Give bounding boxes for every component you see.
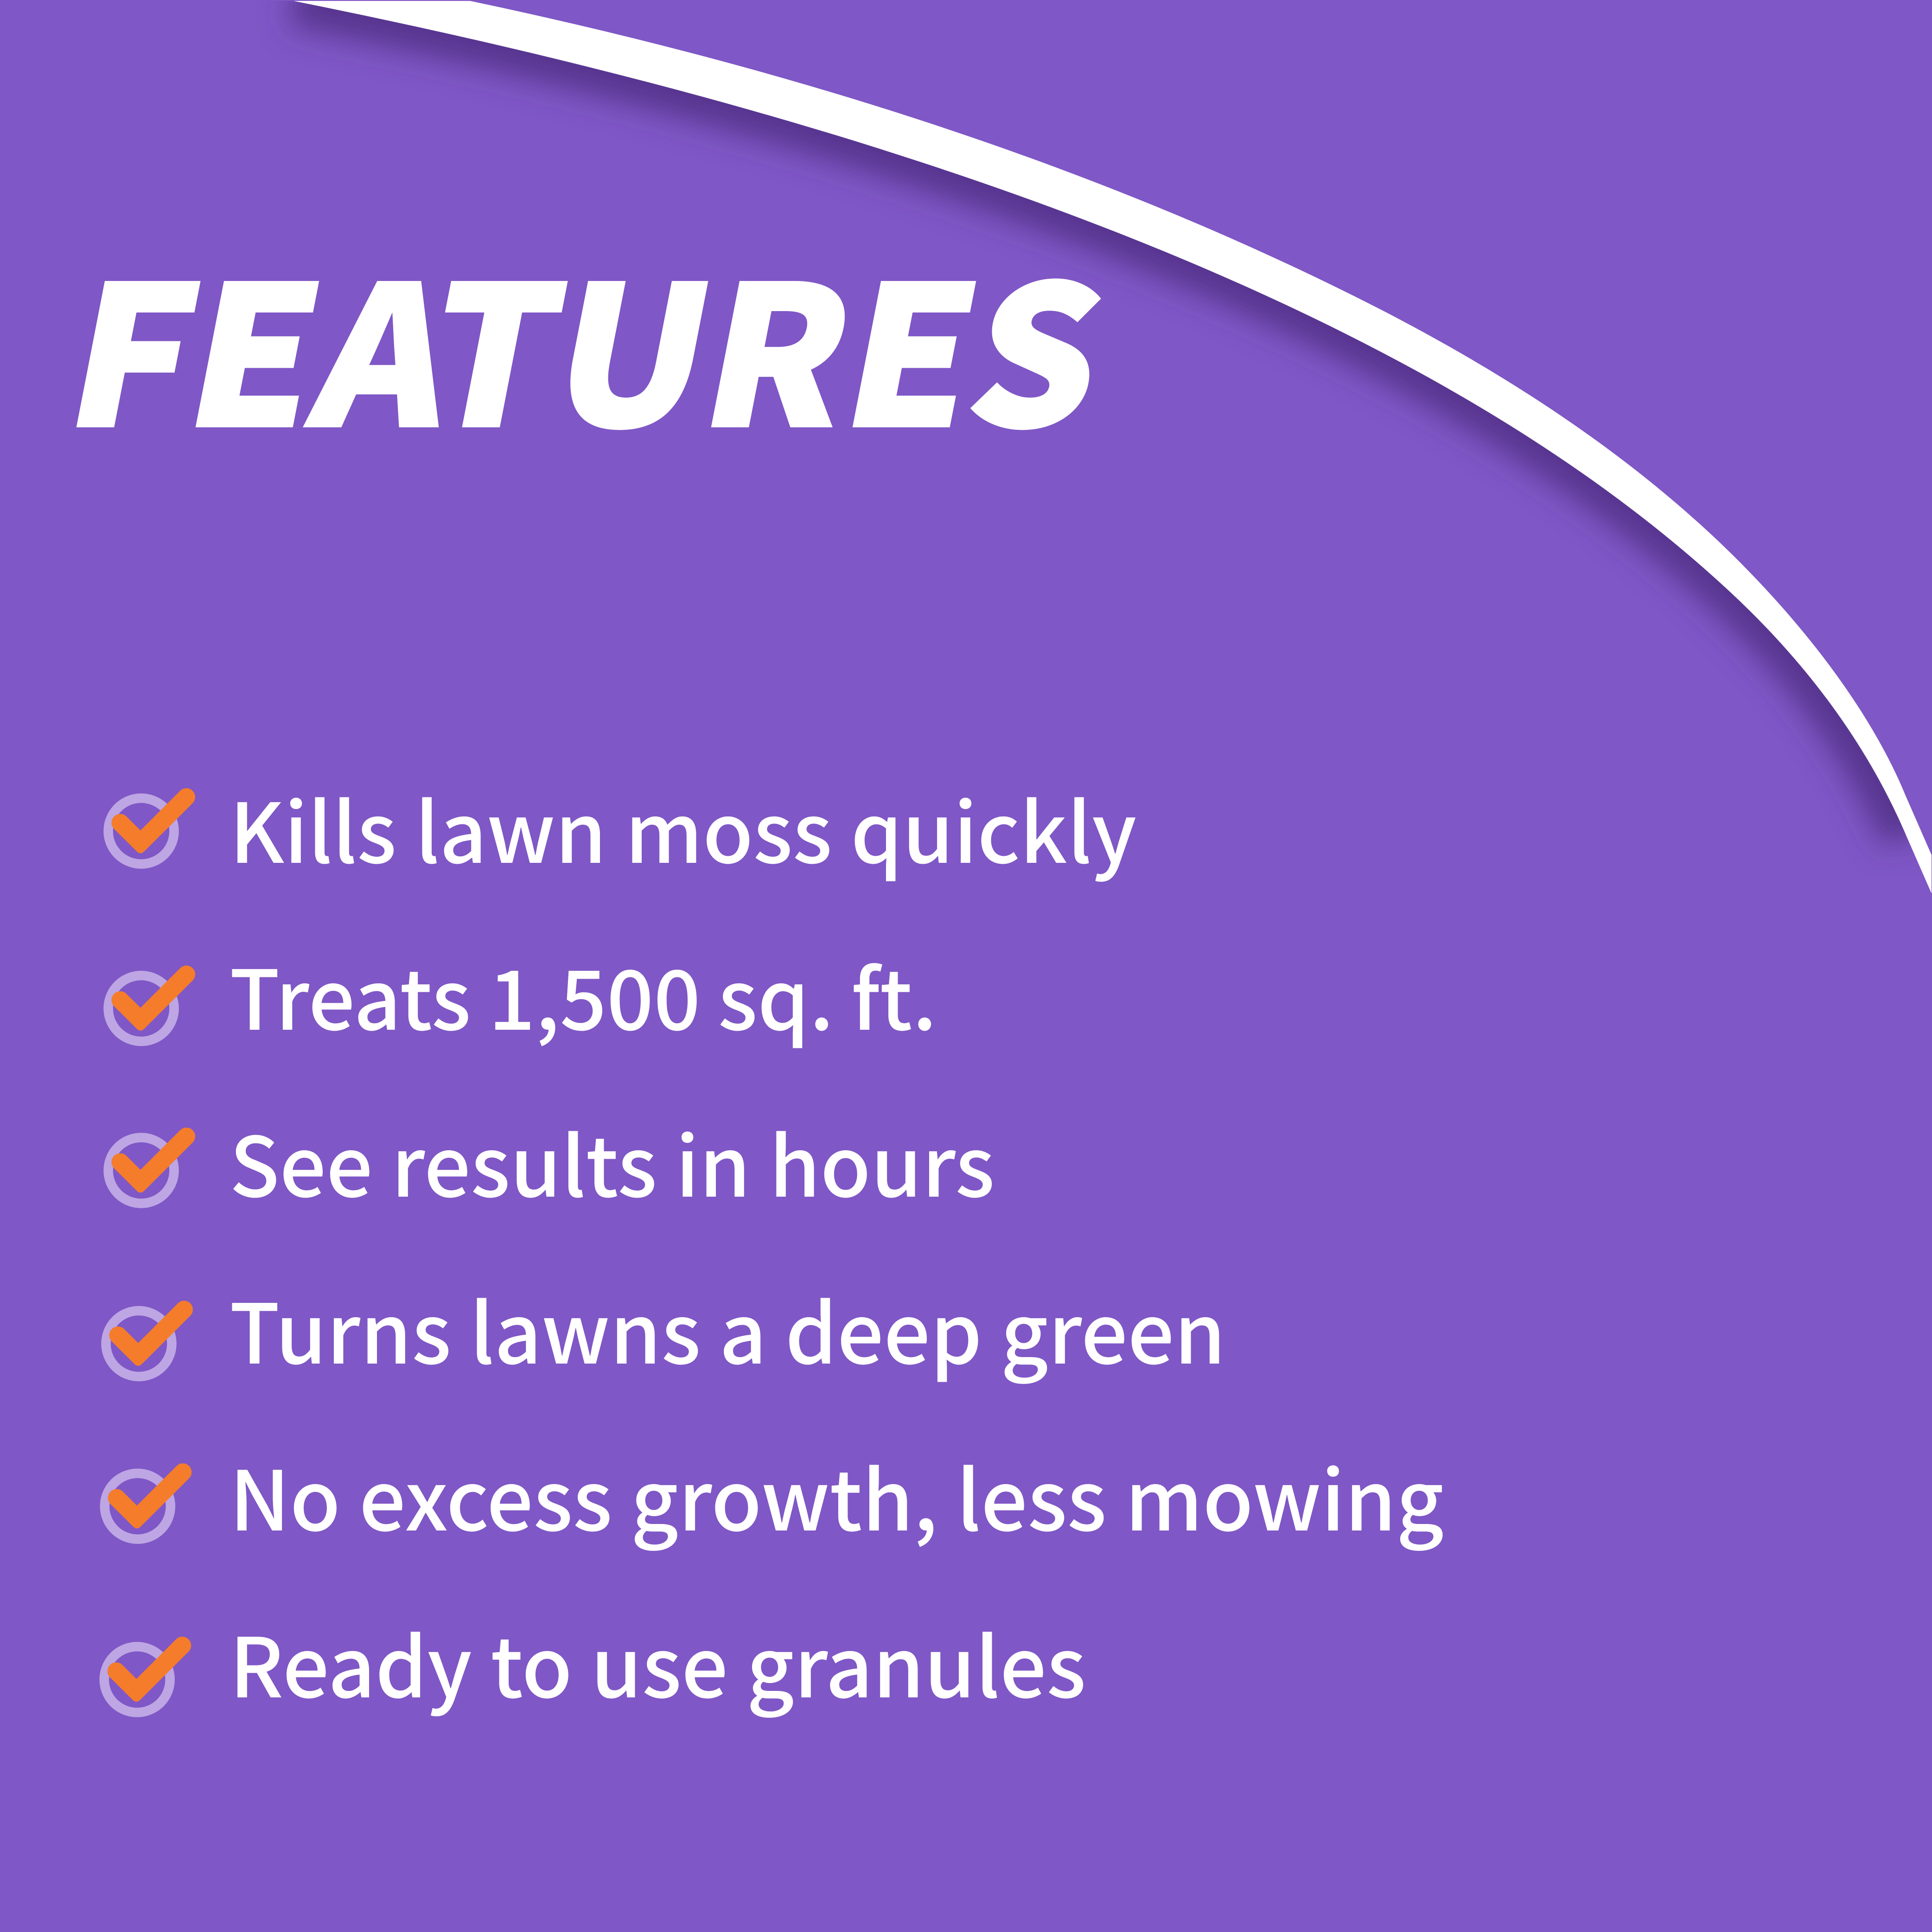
- title: FEATURES: [51, 203, 1129, 482]
- icon: check 6: [104, 1637, 191, 1713]
- text: feature 1: Kills lawn moss quickly: [230, 768, 1136, 887]
- feature 6: [104, 1602, 1086, 1722]
- text: feature 3: See results in hours: [230, 1102, 995, 1221]
- text: feature 6: Ready to use granules: [230, 1602, 1086, 1722]
- icon: check 2: [108, 965, 195, 1041]
- icon: check 5: [105, 1463, 191, 1539]
- text: feature 4: Turns lawns a deep green: [230, 1269, 1226, 1388]
- page curl shadow: [293, 1, 1907, 837]
- feature 4: [106, 1269, 1226, 1388]
- feature 5: [105, 1435, 1444, 1555]
- feature 3: [108, 1102, 995, 1221]
- icon: check 3: [108, 1128, 195, 1204]
- icon: check 4: [106, 1301, 193, 1377]
- feature 1: [108, 768, 1136, 887]
- text: feature 2: Treats 1,500 sq. ft.: [230, 935, 937, 1054]
- white curved page band: [293, 1, 1932, 893]
- icon: check 1: [108, 788, 195, 864]
- feature 2: [108, 935, 937, 1054]
- text: feature 5: No excess growth, less mowing: [230, 1435, 1444, 1555]
